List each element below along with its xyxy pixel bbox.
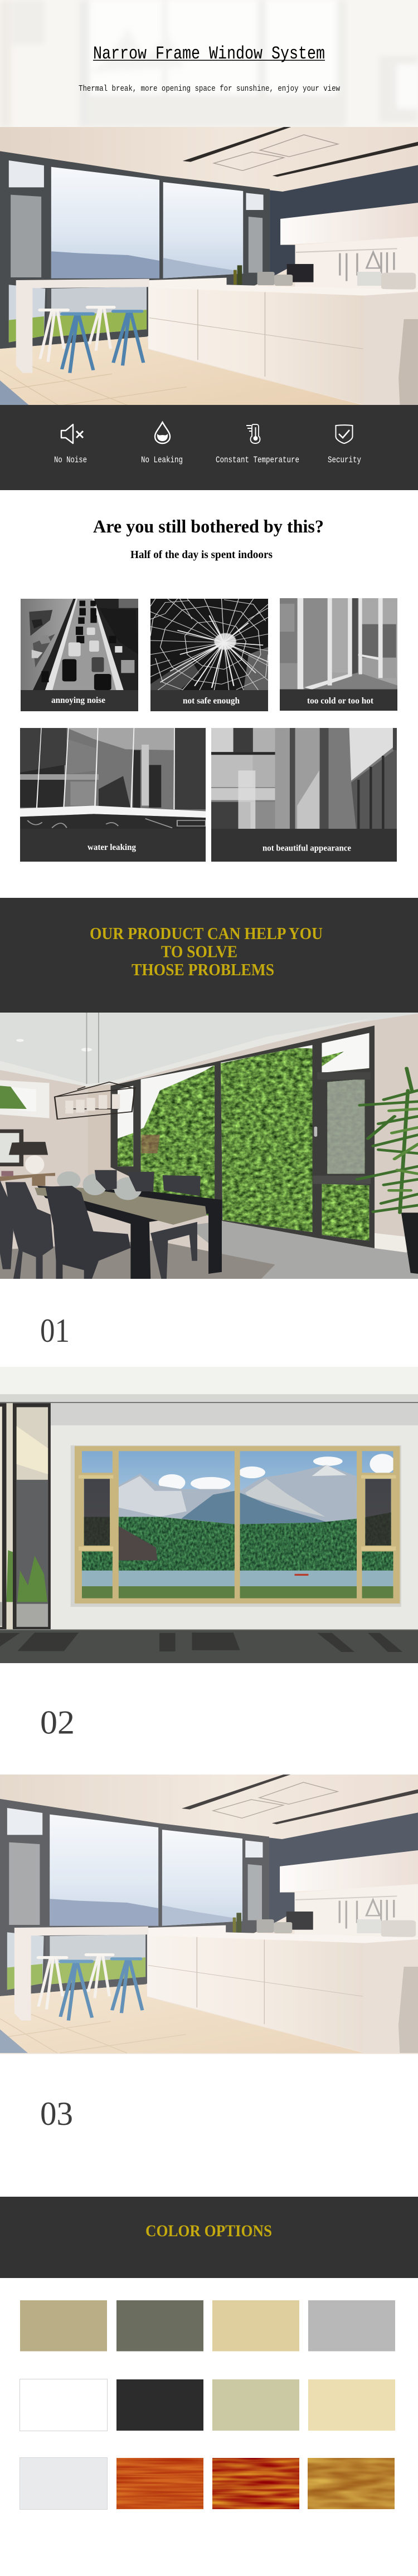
stools [38, 306, 143, 373]
feature labels: No Noise [54, 455, 87, 465]
breakfast bar [16, 279, 149, 373]
subheading: Half of the day is spent indoors [130, 549, 273, 561]
photo: kitchen repeat [0, 1775, 418, 2054]
icon: thermometer [246, 424, 260, 443]
panel: water leaking [20, 728, 206, 862]
panel: too cold or too hot [280, 598, 397, 711]
feature labels: No Leaking [141, 455, 183, 465]
chandelier [55, 1013, 136, 1119]
feature labels: Constant Temperature [216, 455, 299, 465]
window wall [111, 1025, 375, 1248]
panel: too cold or too hot: too cold or too hot [307, 696, 374, 706]
icon: no noise [61, 424, 83, 443]
floor and rug [0, 1221, 418, 1279]
panel: not safe enough: not safe enough [183, 696, 240, 706]
icon: shield [336, 425, 352, 443]
number 02: 02 [40, 1704, 75, 1741]
pavement [0, 1629, 418, 1663]
photo: dining room with dark frame windows [0, 1013, 418, 1279]
vases [57, 1171, 142, 1200]
panel: not safe enough [150, 599, 268, 711]
feature labels [54, 455, 361, 465]
swatch row 3 [20, 2457, 395, 2510]
window wall [0, 151, 270, 349]
feature band [0, 405, 418, 490]
panel: not beautiful appearance: not beautiful appearance [263, 843, 351, 853]
panel: solution banner: THOSE PROBLEMS [132, 960, 274, 979]
photo: wall with champagne window and mountain view [0, 1367, 418, 1663]
panel: color options banner [0, 2197, 418, 2278]
panel: annoying noise [21, 599, 138, 711]
title: Narrow Frame Window System [93, 43, 325, 64]
panel: color options banner: COLOR OPTIONS [145, 2222, 272, 2240]
mirror and lamp [0, 1130, 55, 1186]
dining table [35, 1186, 222, 1279]
appliances on counter [234, 264, 416, 290]
dark wall and cabinets [270, 165, 418, 290]
icon: water drop [155, 422, 170, 443]
color swatches [20, 2300, 395, 2510]
heading: are you still bothered: Are you still bothered by this? [93, 517, 324, 537]
swatch row 2 [20, 2379, 395, 2431]
number 03: 03 [40, 2095, 73, 2132]
panel: water leaking: water leaking [88, 843, 136, 852]
panel: not beautiful appearance [211, 728, 397, 862]
kitchen island [148, 278, 418, 405]
panel: solution banner [0, 898, 418, 1013]
window [71, 1445, 401, 1607]
panel: solution banner: OUR PRODUCT CAN HELP YOU [90, 923, 323, 943]
ceiling lights [183, 127, 418, 177]
potted plant [357, 1068, 418, 1274]
chairs [0, 1170, 201, 1279]
clerestory window [0, 1080, 49, 1118]
feature labels: Security [328, 455, 361, 465]
swatch row 1 [20, 2300, 395, 2352]
subtitle: Thermal break, more opening space for sunshine, enjoy your view [79, 84, 340, 94]
clear chair [398, 319, 418, 405]
number 01: 01 [40, 1312, 70, 1349]
hero header panel [0, 0, 418, 127]
side glass door [0, 1403, 51, 1629]
panel: annoying noise: annoying noise [51, 696, 105, 705]
panel: solution banner: TO SOLVE [161, 941, 237, 961]
floor [0, 337, 364, 405]
photo: kitchen with narrow frame windows [0, 127, 418, 405]
